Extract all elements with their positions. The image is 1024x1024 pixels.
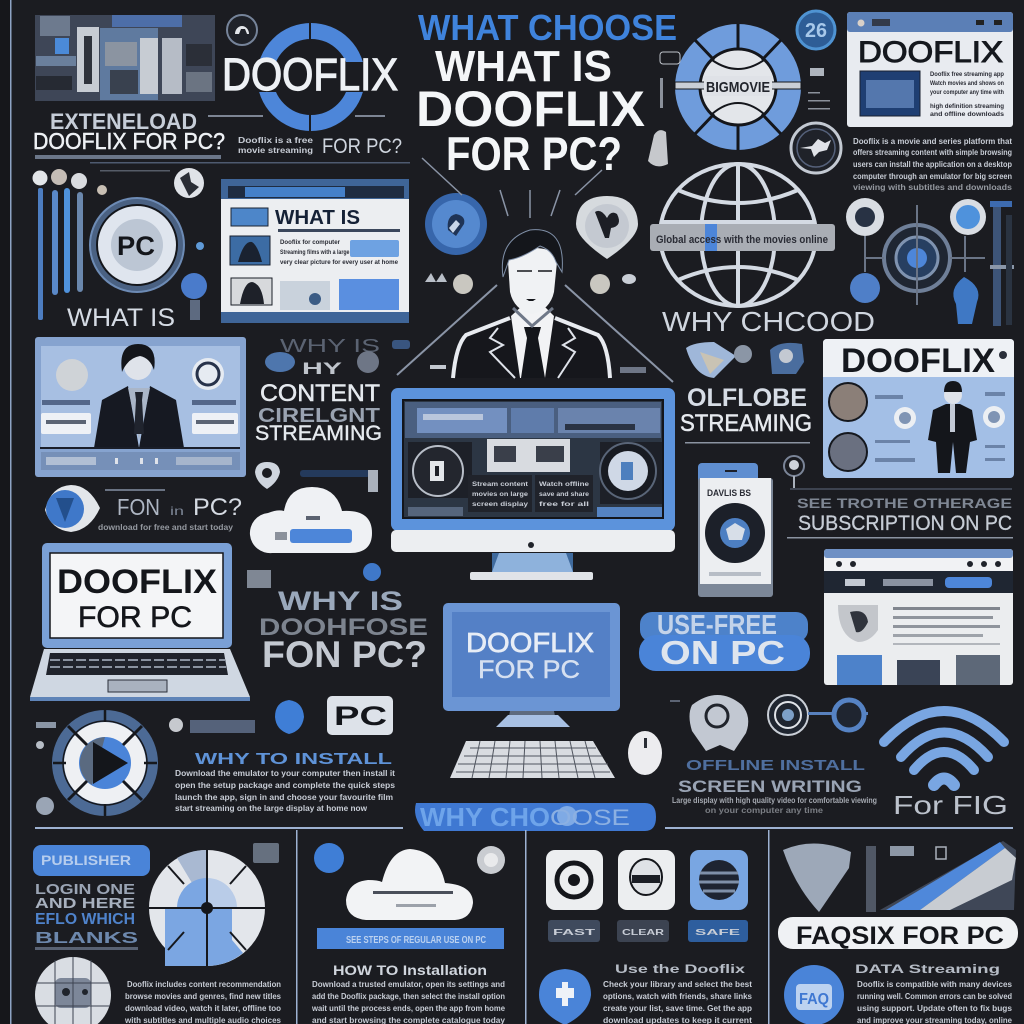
panel: bottom column four [778, 841, 1018, 1024]
panel: what is window [221, 179, 409, 323]
illustration: main monitor: save and share [539, 492, 590, 498]
icon: cloud [346, 849, 473, 920]
title: what is dooflix for pc: WHAT IS [435, 42, 612, 91]
text block: column two body: add the Dooflix package, then select the install option [312, 992, 505, 1001]
icon: blue dot tool [97, 185, 207, 320]
pill: why choose: OOSE [550, 805, 630, 830]
illustration: main monitor: free for all [539, 502, 590, 508]
chart: segmented wheel: BIGMOVIE [706, 79, 770, 96]
heading: why choose: WHY CHCOOD [662, 306, 875, 337]
panel: what is window: very clear picture for every user at home [280, 260, 399, 266]
title: what is dooflix for pc [416, 42, 645, 180]
illustration: second monitor: FOR PC [478, 656, 580, 684]
text block: column three body: options, watch with friends, share links [603, 992, 753, 1001]
text block: bold column text [35, 881, 138, 950]
text block: column two body [311, 980, 506, 1024]
text block: bold column text: BLANKS [35, 930, 138, 947]
panel: dooflix window top right: Watch movies and shows on [930, 81, 1004, 87]
heading: content streaming: CONTENT [260, 380, 380, 407]
text block: top right paragraph: Dooflix is a movie and series platform that [853, 137, 1012, 146]
labels: tile captions [548, 920, 748, 942]
pills: use free on pc [639, 609, 810, 671]
small icons left of install text [36, 718, 255, 815]
text block: small caption: Dooflix is a free [238, 136, 314, 145]
illustration: laptop [30, 543, 250, 701]
text: for fig: For FIG [893, 790, 1008, 820]
icon: house badge [227, 15, 257, 45]
dividers [35, 827, 1013, 1024]
icon: knob [477, 846, 505, 874]
icon: circular connector cluster [846, 198, 1014, 326]
text block: screen writing: on your computer any time [705, 806, 824, 815]
text block: top right paragraph: computer through an emulator for big screen [853, 172, 1012, 181]
panel: dooflix window top right: and offline downloads [930, 112, 1005, 118]
badge: pc: PC [334, 701, 387, 731]
text block: how to install: launch the app, sign in and choose your favourite film [175, 793, 393, 802]
text block: small caption: FOR PC? [322, 135, 402, 158]
icon: wifi [884, 711, 1004, 785]
title: what is dooflix for pc: FOR PC? [446, 127, 622, 180]
logo: dooflix ring [222, 20, 398, 132]
icon: number badge: 26 [805, 20, 827, 42]
pills: use free on pc: ON PC [660, 634, 785, 671]
illustration: fan shape [783, 843, 851, 912]
text block: how to install: start streaming on the large display at home now [175, 804, 368, 813]
panel: dooflix window top right: DOOFLIX [858, 36, 1003, 69]
illustration: second monitor: DOOFLIX [466, 627, 594, 658]
icon: tile three [690, 850, 748, 910]
text block: column four body: running well. Common errors can be solved [857, 992, 1012, 1001]
small icons beside presenter [392, 273, 646, 373]
pill: faq [778, 917, 1018, 950]
decorative pointer lines [397, 158, 673, 382]
panel: dooflix window top right: your computer any time with [930, 90, 1004, 96]
icon: small lens [784, 456, 804, 490]
icon: sliders [32, 168, 204, 320]
title: what is dooflix for pc: DOOFLIX [416, 81, 645, 137]
icon: cloud with bar [250, 487, 372, 553]
heading: content streaming: WHY IS [280, 336, 380, 356]
icons: small row [866, 846, 946, 912]
icon: shield heart badge [576, 196, 638, 259]
icon: number badge [797, 11, 835, 49]
text block: column three body: create your list, save time. Get the app [603, 1004, 752, 1013]
panel: browser window lower right [824, 549, 1013, 685]
text block: how to install: Download the emulator to your computer then install it [175, 769, 395, 778]
title: what choose: WHAT CHOOSE [418, 7, 677, 48]
panel: dooflix window top right: Dooflix free streaming app [930, 72, 1004, 78]
pills: use free on pc: USE-FREE [657, 609, 777, 640]
labels: tile captions: FAST [553, 928, 595, 937]
text block: column one body [124, 980, 282, 1024]
icon: tile one [546, 850, 603, 910]
heading: content streaming: STREAMING [255, 422, 382, 445]
text block: column three body: Check your library and select the best [603, 980, 752, 989]
icon: play dial [52, 710, 158, 816]
panel: bottom column one [33, 843, 282, 1024]
heading: why choose for pc: FON PC? [262, 634, 427, 675]
panel: what is window: Dooflix for computer [280, 240, 341, 246]
text block: top right paragraph: users can install the application on a desktop [853, 160, 1012, 169]
icon: tile two [618, 850, 675, 910]
heading: offline streaming [680, 384, 812, 444]
icon: small server [253, 843, 279, 863]
illustration: laptop: FOR PC [78, 601, 192, 634]
labels: tile captions: CLEAR [622, 928, 664, 937]
icon: keyboard [450, 741, 615, 778]
panel: dooflix window top right: high definition streaming [930, 104, 1004, 110]
heading: subscription on pc: SUBSCRIPTION ON PC [798, 512, 1012, 535]
heading: why choose for pc [247, 563, 428, 675]
icon: blue disc [425, 193, 487, 255]
heading: offline streaming: OLFLOBE [687, 384, 807, 412]
text block: how to install: WHY TO INSTALL [195, 751, 392, 768]
illustration: second monitor [443, 603, 620, 727]
text block: screen writing [672, 757, 877, 815]
icon: blue pin [314, 843, 344, 873]
badge: pc [275, 696, 393, 735]
small glyphs beside the wheel [648, 52, 830, 166]
icon: mouse [628, 731, 662, 775]
icon: faq disc: FAQ [799, 991, 829, 1008]
pill: why choose: WHY CHO [420, 802, 550, 832]
heading: column three: Use the Dooflix [615, 962, 745, 976]
icon: grid ball [35, 957, 111, 1024]
illustration: presenter [453, 230, 610, 378]
heading: offline streaming: STREAMING [680, 410, 812, 437]
illustration: main monitor: Watch offline [539, 482, 590, 488]
bar: blue label: SEE STEPS OF REGULAR USE ON PC [346, 935, 486, 946]
label: globe bar: Global access with the movies online [656, 234, 828, 246]
labels: tile captions: SAFE [695, 928, 741, 937]
panel: thumbnail top left [35, 15, 215, 101]
pill: why choose [415, 802, 656, 832]
heading: subscription on pc: SEE TROTHE OTHERAGE [797, 495, 1012, 511]
chart: segmented wheel [675, 24, 801, 150]
text block: top right paragraph: viewing with subtitles and downloads [853, 183, 1013, 192]
icon: faq disc [784, 965, 844, 1024]
heading: for pc with icon: FON [117, 494, 160, 520]
text block: column two body: wait until the process ends, open the app from home [311, 1004, 506, 1013]
heading: column four: DATA Streaming [855, 962, 1000, 976]
panel: dooflix card right: DOOFLIX [841, 342, 995, 380]
illustration: laptop: DOOFLIX [57, 563, 217, 601]
heading: for pc with icon: in [170, 504, 184, 518]
icon: blue shield [539, 969, 591, 1024]
panel: dooflix card right [823, 339, 1014, 478]
heading: content streaming [255, 336, 382, 445]
text block: bold column text: EFLO WHICH [35, 911, 135, 928]
heading: extended download [33, 109, 225, 159]
illustration: diagonal ribbon [880, 841, 1016, 910]
heading: what is: WHAT IS [67, 304, 175, 332]
text block: column four body [857, 980, 1013, 1024]
heading: how to: HOW TO Installation [333, 962, 487, 978]
text block: screen writing: OFFLINE INSTALL [686, 757, 865, 774]
icon: pc dial: PC [117, 231, 155, 261]
heading: extended download: EXTENELOAD [50, 109, 197, 134]
heading: for pc with icon: download for free and start today [98, 523, 234, 532]
text block: column four body: Dooflix is compatible with many devices [857, 980, 1013, 989]
illustration: main monitor: screen display [472, 502, 529, 508]
panel: what is window: Streaming films with a large screen display and [280, 250, 398, 256]
text block: small caption: movie streaming [238, 146, 313, 155]
text block: how to install [175, 751, 396, 813]
chart: quadrant wheel [149, 850, 265, 966]
heading: content streaming: CIRELGNT [258, 405, 380, 427]
heading: content streaming: HY [302, 359, 343, 378]
heading: subscription on pc [787, 488, 1013, 538]
heading: why choose for pc: DOOHFOSE [259, 614, 428, 641]
icon: phone: DAVLIS BS [707, 488, 751, 498]
illustration: main monitor: Stream content [472, 482, 528, 488]
icon: phone [698, 463, 773, 597]
text block: column three body [603, 980, 753, 1024]
heading: extended download: DOOFLIX FOR PC? [33, 128, 225, 154]
text block: screen writing: Large display with high quality video for comfortable viewing [672, 796, 877, 805]
text block: column four body: using support. Update often to fix bugs [857, 1004, 1013, 1013]
panel: what is window: WHAT IS [275, 207, 360, 229]
panel: bottom column three [539, 850, 753, 1024]
bar: blue label [317, 928, 504, 949]
heading: why choose for pc: WHY IS [278, 586, 403, 616]
panel: dooflix window top right [847, 12, 1013, 127]
text block: column one body: browse movies and genres, find new titles [125, 992, 282, 1001]
icon: circle badge [791, 123, 841, 173]
text block: column one body: download video, watch it later, offline too [125, 1004, 281, 1013]
label: globe bar [650, 224, 835, 251]
panel: presenter card left [35, 337, 246, 477]
panel: bottom column two [311, 843, 506, 1024]
icon: globe [660, 164, 816, 306]
text block: column two body: Download a trusted emulator, open its settings and [312, 980, 505, 989]
text block: small caption [90, 115, 410, 164]
text block: how to install: open the setup package and complete the quick steps [175, 781, 396, 790]
heading: for pc with icon: PC? [193, 494, 242, 521]
text block: column one body: Dooflix includes content recommendation [127, 980, 281, 989]
pill: column one label [33, 845, 150, 876]
heading: for pc with icon [45, 485, 242, 532]
icons: swirl row [670, 695, 868, 751]
text block: bold column text: LOGIN ONE [35, 881, 135, 898]
text block: bold column text: AND HERE [35, 895, 135, 912]
icons: offline row [686, 342, 804, 378]
icon: heart badge [255, 462, 378, 492]
text block: top right paragraph [853, 137, 1013, 192]
text: pill label: PUBLISHER [41, 852, 131, 868]
illustration: main monitor [391, 388, 675, 580]
pill: faq: FAQSIX FOR PC [796, 922, 1004, 950]
illustration: main monitor: movies on large [472, 492, 529, 498]
icon: pc dial [90, 198, 184, 292]
logo: dooflix ring: DOOFLIX [222, 49, 398, 100]
text block: screen writing: SCREEN WRITING [678, 777, 862, 796]
